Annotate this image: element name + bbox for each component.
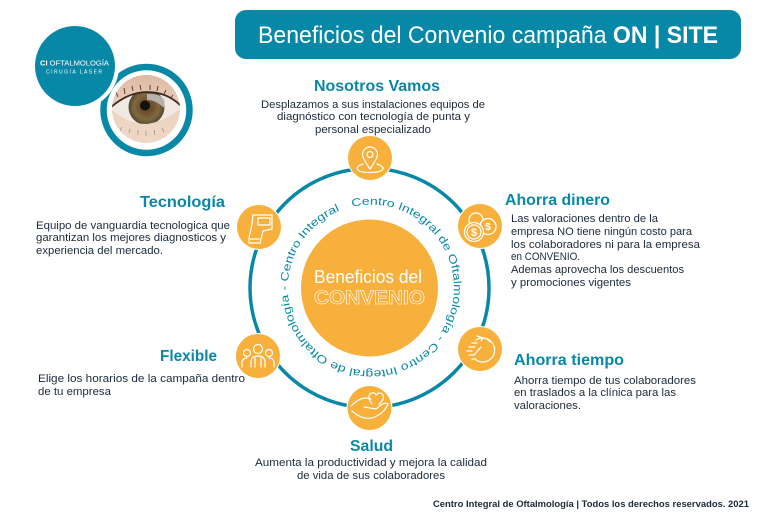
block: Ahorra dinero: empresa NO tiene ningún costo para xyxy=(511,226,693,238)
logo badge: CIRUGÍA LÁSER xyxy=(46,68,102,76)
block: Salud: de vida de sus colaboradores xyxy=(297,470,445,482)
header banner: Beneficios del Convenio campaña ON | SITE xyxy=(258,22,718,49)
center circle: CONVENIO xyxy=(314,287,425,309)
block: Nosotros Vamos: personal especializado xyxy=(315,124,431,136)
footer: Centro Integral de Oftalmología | Todos los derechos reservados. 2021 xyxy=(433,499,749,509)
block: Ahorra dinero: Ademas aprovecha los descuentos xyxy=(511,264,685,276)
block: Ahorra dinero: Las valoraciones dentro de la xyxy=(511,213,659,225)
block: Tecnología: Equipo de vanguardia tecnologica que xyxy=(36,220,230,232)
block: Ahorra dinero: en CONVENIO. xyxy=(511,251,580,263)
block: Nosotros Vamos: diagnóstico con tecnología de punta y xyxy=(277,111,471,123)
block: Nosotros Vamos xyxy=(261,78,485,136)
block: Tecnología xyxy=(36,194,230,257)
block: Ahorra tiempo: Ahorra tiempo xyxy=(514,352,624,369)
icon: thermometer gun xyxy=(236,204,282,250)
icon: hand with heart xyxy=(346,385,392,431)
block: Salud: Salud xyxy=(350,438,393,455)
block: Flexible: Elige los horarios de la campaña dentro xyxy=(38,373,245,385)
icon: coins: $ xyxy=(471,227,477,239)
icon: coins xyxy=(457,203,503,249)
block: Salud xyxy=(255,438,487,482)
icon: three people xyxy=(235,333,281,379)
eye photo with ring xyxy=(104,67,190,153)
logo badge xyxy=(31,22,119,110)
logo badge: CI OFTALMOLOGÍA xyxy=(40,58,109,68)
block: Flexible xyxy=(38,348,245,398)
block: Flexible: de tu empresa xyxy=(38,386,112,398)
center circle xyxy=(301,220,438,356)
block: Tecnología: garantizan los mejores diagnosticos y xyxy=(36,232,227,244)
block: Ahorra dinero: los colaboradores ni para la empresa xyxy=(511,239,701,251)
center circle: Beneficios del xyxy=(314,267,422,287)
block: Tecnología: Tecnología xyxy=(140,194,225,211)
block: Ahorra tiempo: en traslados a la clínica para las xyxy=(514,387,677,399)
block: Nosotros Vamos: Nosotros Vamos xyxy=(314,78,440,95)
block: Ahorra tiempo xyxy=(514,352,697,412)
block: Nosotros Vamos: Desplazamos a sus instalaciones equipos de xyxy=(261,99,485,111)
header banner xyxy=(235,10,741,59)
block: Flexible: Flexible xyxy=(160,348,217,365)
block: Ahorra tiempo: Ahorra tiempo de tus colaboradores xyxy=(514,375,697,387)
circular text: Centro Integral de Oftalmología - Centro Integral de Oftalmología - Centro Integral xyxy=(280,198,462,377)
icon: location pin xyxy=(347,135,393,181)
icon: stopwatch xyxy=(457,326,503,372)
block: Salud: Aumenta la productividad y mejora la calidad xyxy=(255,457,487,469)
block: Ahorra dinero: y promociones vigentes xyxy=(511,277,632,289)
outer ring xyxy=(250,168,489,408)
block: Ahorra dinero xyxy=(505,192,701,289)
block: Ahorra tiempo: valoraciones. xyxy=(514,400,581,412)
block: Tecnología: experiencia del mercado. xyxy=(36,245,163,257)
icon: coins: $ xyxy=(485,222,491,233)
block: Ahorra dinero: Ahorra dinero xyxy=(505,192,610,209)
